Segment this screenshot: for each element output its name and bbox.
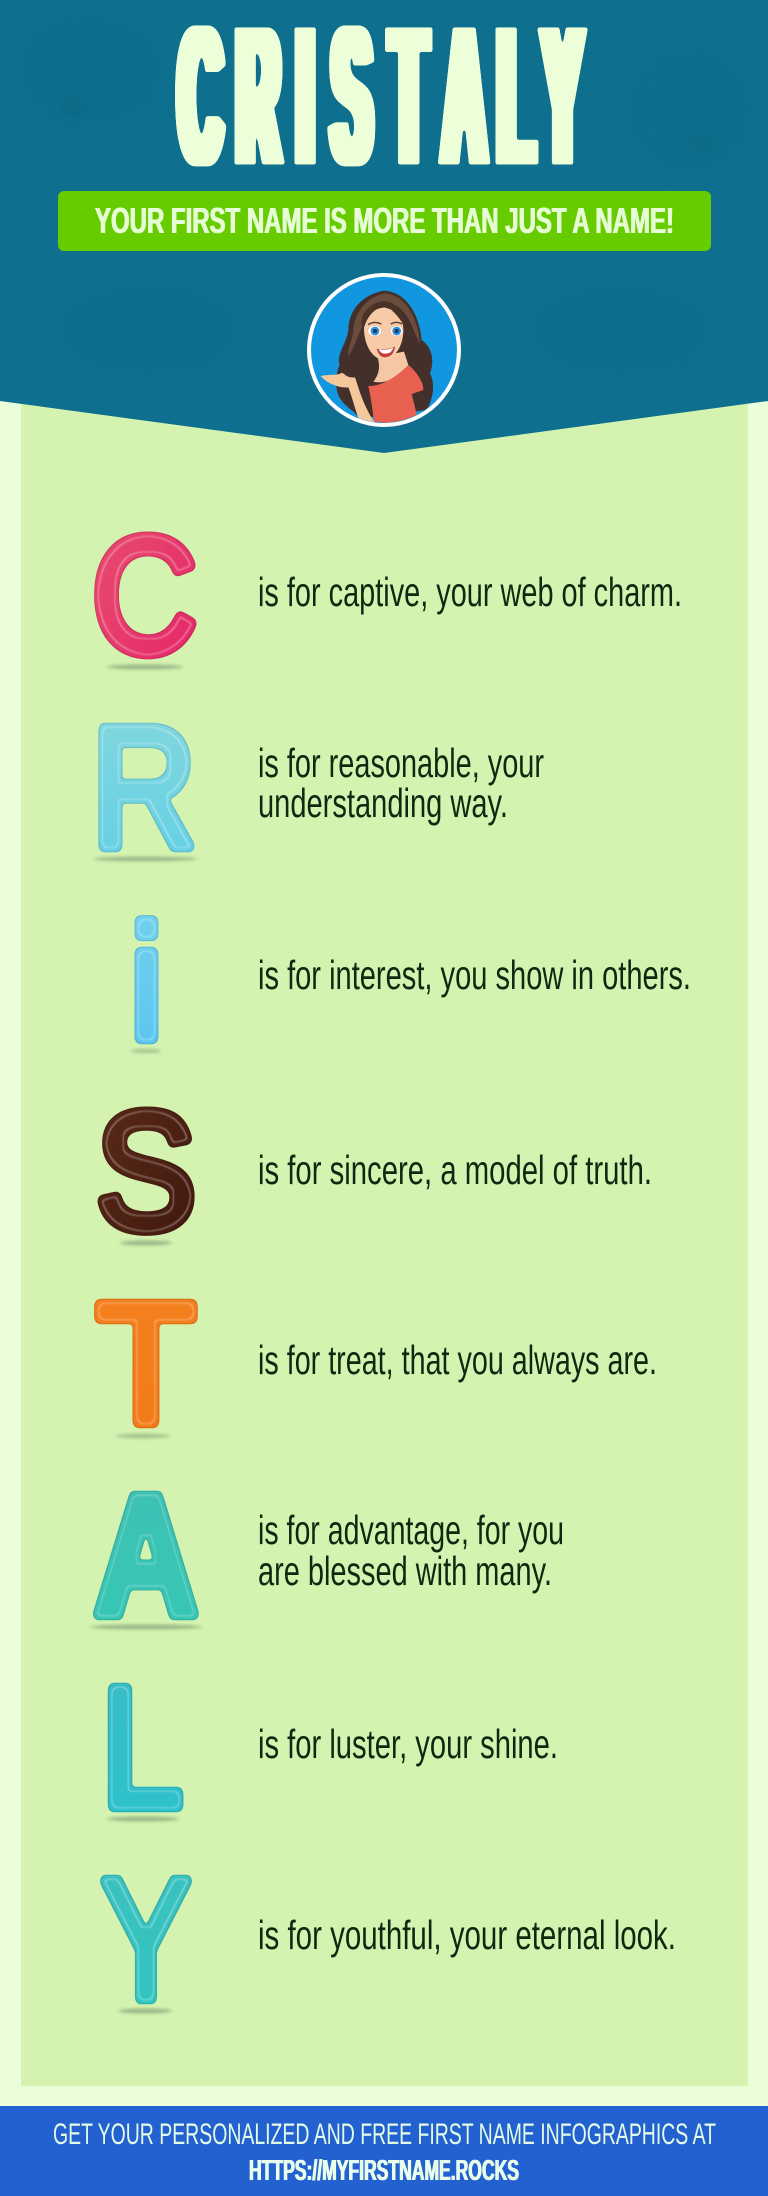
text: R lines: understanding way.: [258, 780, 508, 826]
fringe: [362, 301, 403, 328]
row: L: [101, 1652, 558, 1842]
hair: [336, 291, 433, 418]
letter R: R: [92, 693, 196, 883]
letter S: S: [96, 1079, 196, 1264]
row: I: [130, 893, 691, 1073]
header background with chevron: [0, 0, 768, 453]
footer: [0, 2106, 768, 2196]
letter L: L: [101, 1652, 183, 1842]
shirt: [368, 365, 423, 423]
brows: [368, 322, 402, 325]
text: R lines: [258, 740, 544, 826]
letter T: T: [96, 1270, 196, 1459]
text: R lines: is for reasonable, your: [258, 740, 544, 786]
mouth: [377, 347, 395, 357]
letter I: i: [130, 893, 163, 1073]
panel: letters background: [21, 395, 748, 2086]
row: S: [96, 1079, 652, 1264]
footer: HTTPS://MYFIRSTNAME.ROCKS: [249, 2155, 519, 2187]
row: C: [92, 504, 682, 686]
text: L line: is for luster, your shine.: [258, 1721, 558, 1767]
hair highlights: [348, 293, 420, 357]
text: A lines: [258, 1507, 564, 1594]
arm and hand: [321, 373, 375, 423]
text: A lines: are blessed with many.: [258, 1548, 552, 1594]
text: A lines: is for advantage, for you: [258, 1507, 564, 1553]
neck: [373, 352, 408, 382]
row: T: [96, 1270, 657, 1459]
face: [364, 307, 403, 360]
banner: [58, 191, 711, 251]
letter C: C: [92, 504, 197, 686]
row: Y: [102, 1845, 676, 2035]
row: A: [90, 1461, 564, 1651]
avatar: [307, 273, 461, 427]
eyes: [368, 326, 381, 336]
row: R: [92, 693, 544, 883]
letter Y: Y: [102, 1845, 190, 2035]
letter A: A: [94, 1461, 198, 1651]
